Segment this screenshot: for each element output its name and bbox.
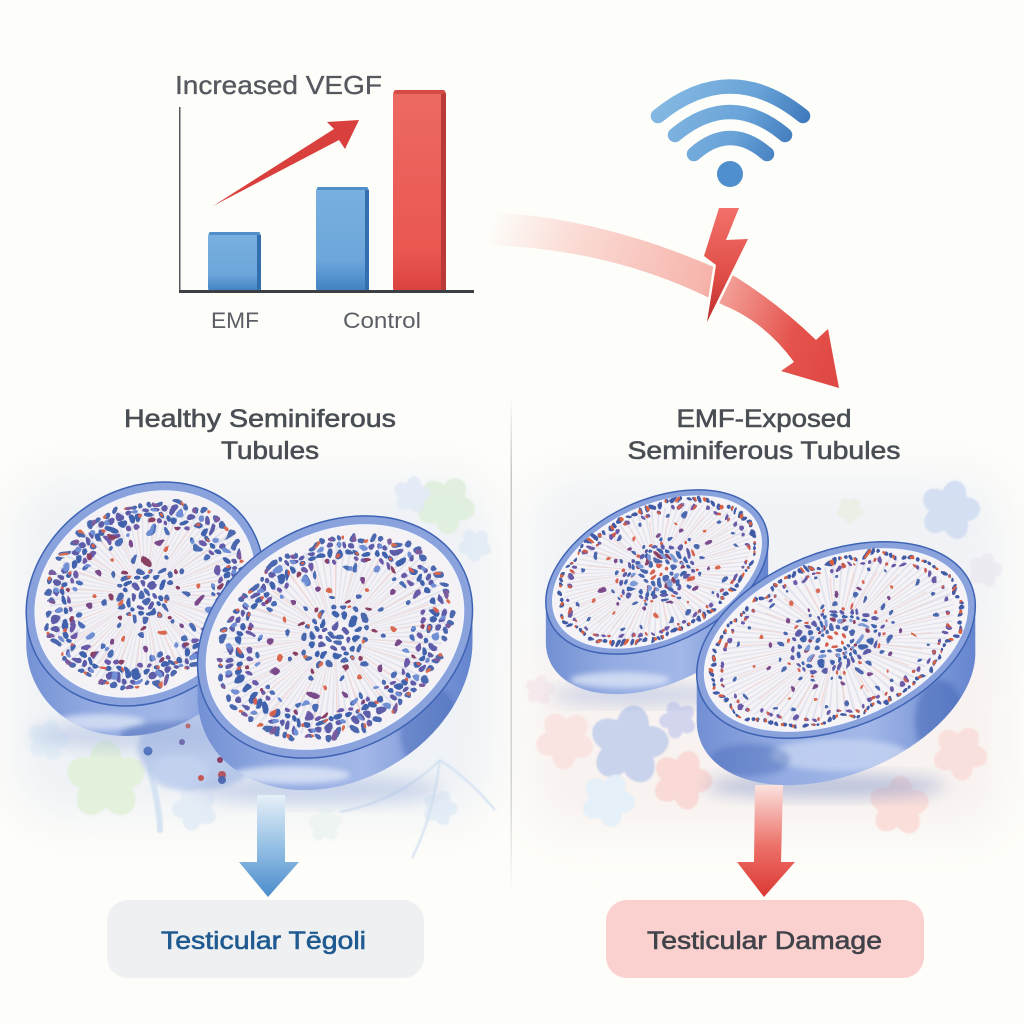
rim (520, 457, 794, 687)
panel wash: exposed tubules background (532, 478, 1002, 830)
flowers: exposed side decoration (521, 472, 1008, 840)
arrow: red down (737, 785, 795, 897)
cell layer (166, 480, 504, 794)
rim (153, 468, 517, 806)
cell layer (529, 465, 785, 679)
rim (0, 436, 308, 752)
trend arrow (213, 120, 359, 206)
outcome label: Testicular Tēgoli: Testicular Tēgoli (161, 927, 366, 955)
arrow: blue down (239, 795, 299, 897)
flowers: healthy side decoration (20, 464, 500, 858)
heading: exposed tubules: EMF-Exposed (676, 405, 852, 433)
panel wash: healthy tubules background (14, 478, 492, 818)
tubule wall (696, 614, 976, 786)
bar chart: increased VEGF (175, 70, 474, 333)
bar: control red (393, 90, 446, 292)
outcome label: Testicular Damage: Testicular Damage (647, 927, 882, 955)
tubule: exposed left (520, 457, 794, 705)
outcome box: exposed (606, 900, 924, 978)
heading: healthy tubules: Tubules (221, 437, 319, 465)
heading: exposed tubules: Seminiferous Tubules (628, 437, 900, 465)
tubule wall (546, 550, 768, 694)
cell layer (678, 513, 994, 767)
watercolor blob between healthy tubules (138, 706, 262, 790)
y axis (179, 107, 180, 292)
heading: exposed tubules (628, 405, 900, 465)
chart title: Increased VEGF (175, 70, 382, 100)
tubule: healthy right (196, 515, 474, 811)
outcome box: healthy (107, 900, 424, 978)
vertical divider (510, 395, 512, 895)
tubule: exposed right (696, 541, 976, 806)
icon: lightning bolt (704, 208, 748, 322)
tubule wall (198, 623, 472, 790)
cell layer (0, 449, 295, 739)
heading: healthy tubules (124, 405, 396, 465)
x axis (179, 290, 474, 293)
tubule: healthy left (25, 481, 262, 754)
icon: wifi signal (658, 86, 803, 187)
heading: healthy tubules: Healthy Seminiferous (124, 405, 396, 433)
rim (668, 504, 1004, 776)
arrow: large curved red arrow (490, 212, 839, 388)
tubule wall (26, 622, 200, 736)
bar: EMF (208, 232, 261, 292)
bar: middle blue (316, 187, 369, 292)
label: Control: Control (343, 308, 421, 333)
label: EMF: EMF (211, 308, 259, 333)
